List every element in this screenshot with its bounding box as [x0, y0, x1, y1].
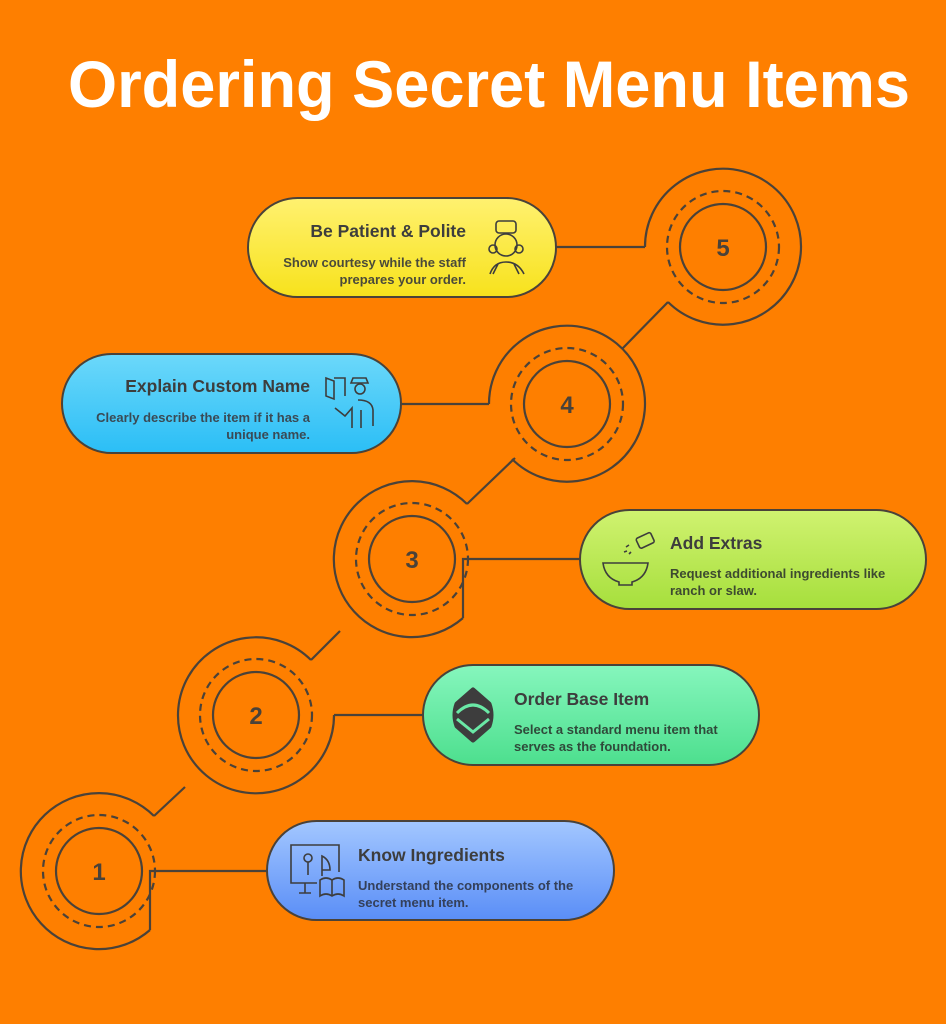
panel: order base item: serves as the foundation.	[514, 739, 671, 754]
panel: add extras: ranch or slaw.	[670, 583, 757, 598]
step numbers	[92, 235, 730, 886]
step numbers: 4	[560, 392, 574, 419]
connector network	[21, 169, 801, 949]
panel: add extras: Add Extras	[670, 533, 763, 553]
panel: add extras: Request additional ingredients like	[670, 566, 885, 581]
panel: explain custom name: Clearly describe the item if it has a	[96, 410, 311, 425]
panel: explain custom name	[62, 354, 401, 453]
panel: know ingredients	[267, 821, 614, 920]
icon: layered diamond	[455, 690, 491, 740]
icon: menu and waiter	[326, 378, 373, 428]
panel: order base item	[423, 665, 759, 765]
circle 4	[401, 302, 668, 482]
panel: explain custom name: Explain Custom Name	[125, 376, 310, 396]
panel: be patient & polite	[248, 198, 556, 297]
circle 1	[21, 787, 267, 949]
step numbers: 2	[249, 703, 263, 730]
panel: know ingredients: Know Ingredients	[358, 845, 505, 865]
panel: explain custom name: unique name.	[226, 427, 310, 442]
panel: order base item: Order Base Item	[514, 689, 649, 709]
panel: know ingredients: secret menu item.	[358, 895, 469, 910]
panel: add extras	[580, 510, 926, 609]
step numbers: 5	[716, 235, 730, 262]
panel: be patient & polite: Be Patient & Polite	[310, 221, 466, 241]
panel: order base item: Select a standard menu item that	[514, 722, 718, 737]
icon: bowl with seasoning	[603, 532, 655, 585]
icon: screen with book	[291, 845, 344, 896]
icon: server person	[489, 221, 524, 274]
panel: be patient & polite: prepares your order.	[340, 272, 466, 287]
circle 2	[178, 631, 423, 793]
title: Ordering Secret Menu Items	[68, 47, 910, 121]
panel: know ingredients: Understand the components of the	[358, 878, 573, 893]
circle 5	[556, 169, 801, 325]
circle 3	[334, 458, 580, 637]
step numbers: 3	[405, 547, 419, 574]
panel: be patient & polite: Show courtesy while the staff	[283, 255, 467, 270]
step numbers: 1	[92, 859, 106, 886]
